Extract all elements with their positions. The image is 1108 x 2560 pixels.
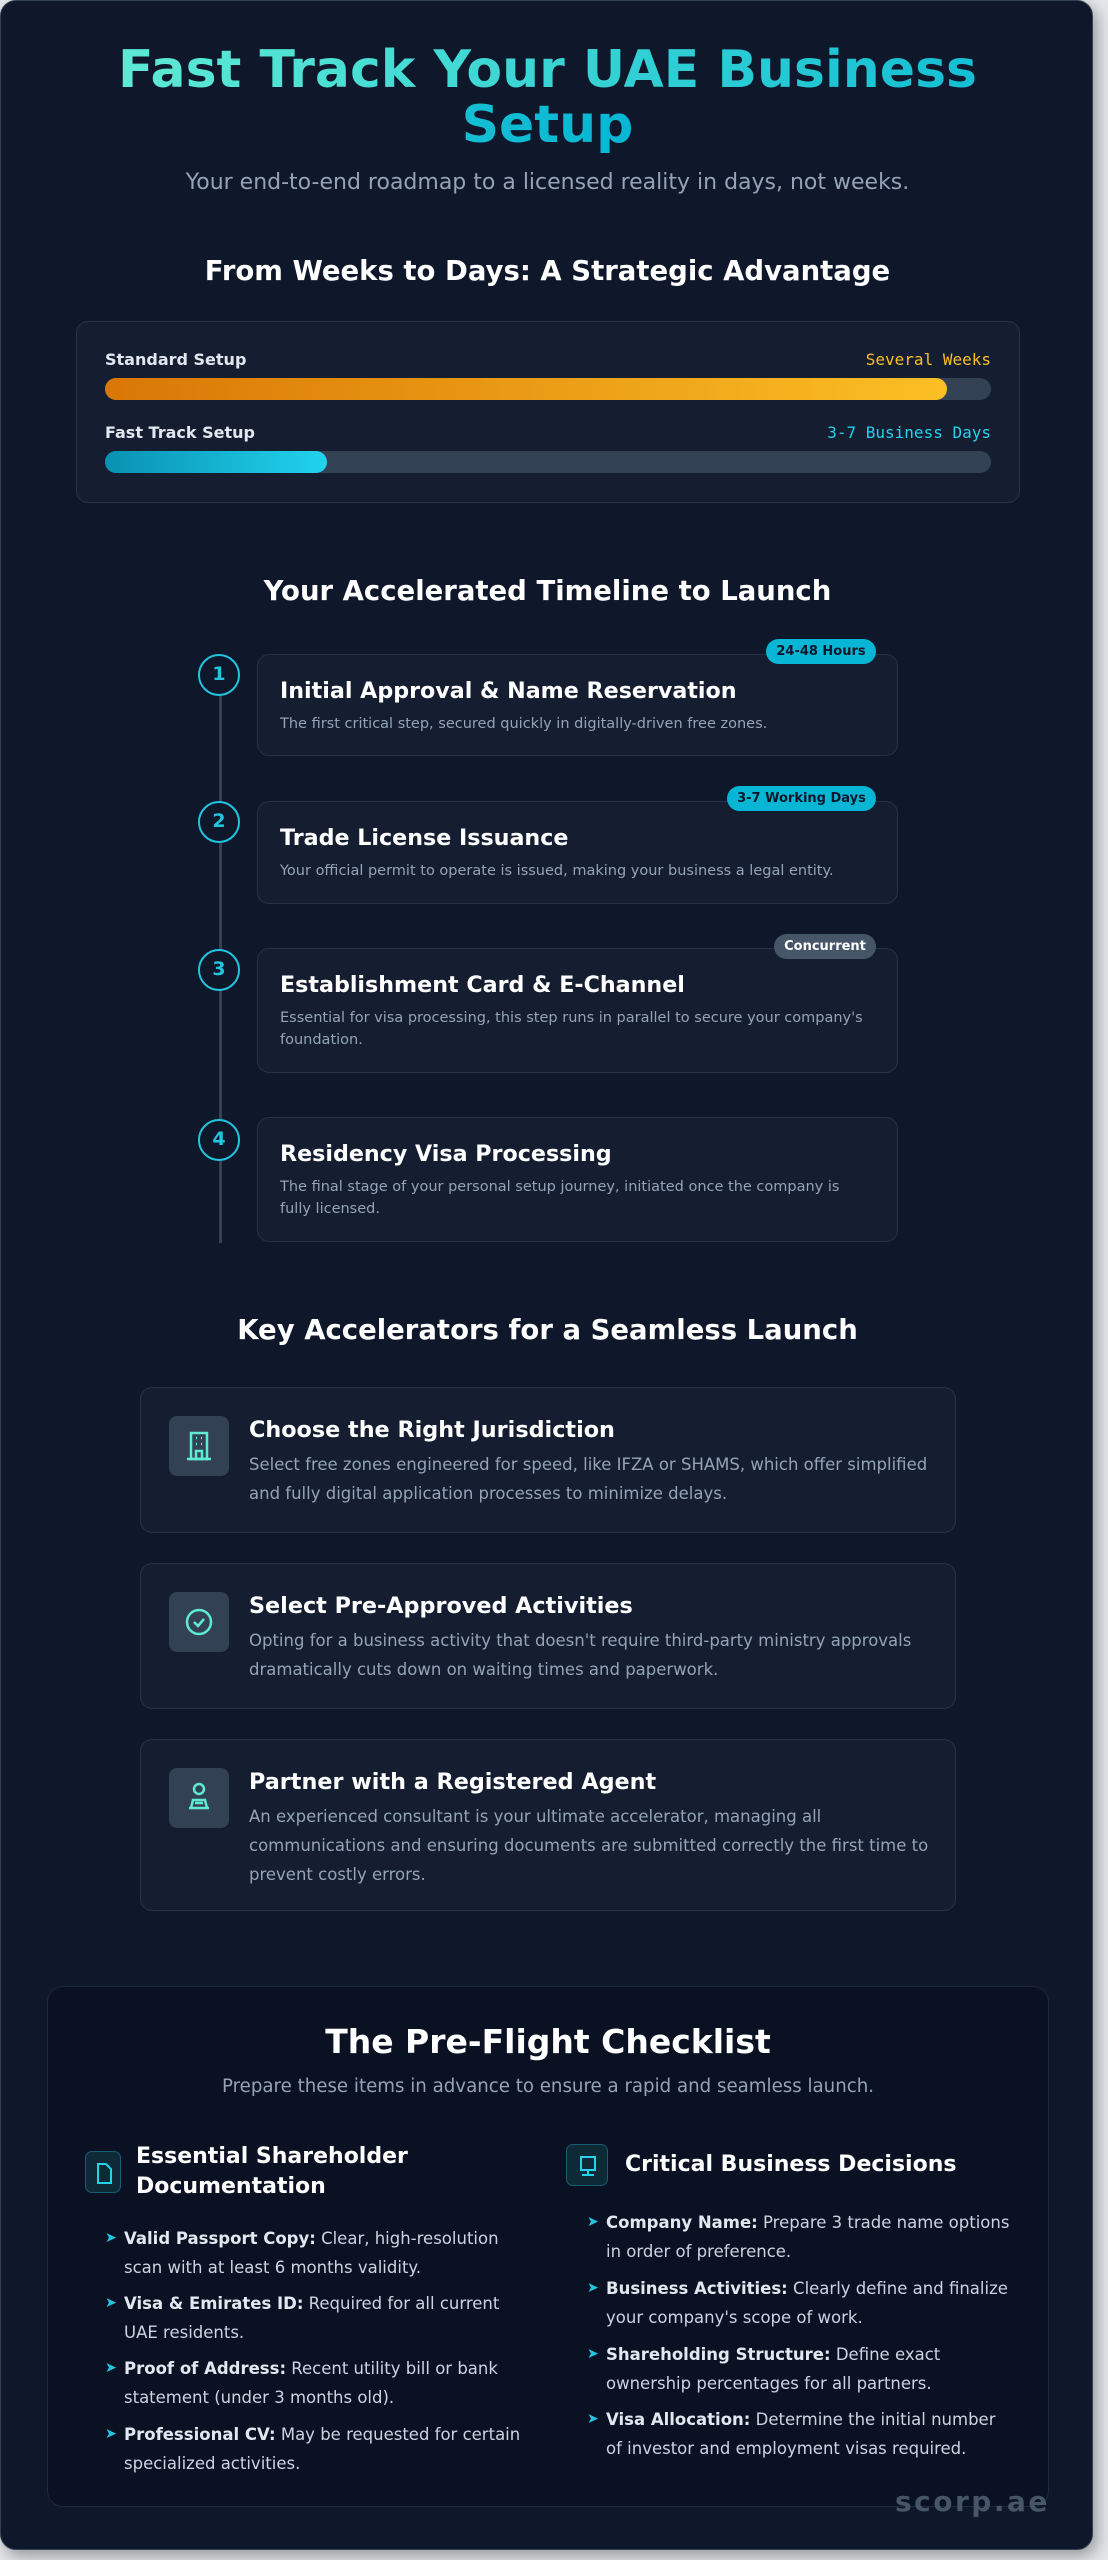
heading: accelerators: Key Accelerators for a Seamless Launch [237, 1314, 858, 1346]
watermark: scorp.ae [895, 2485, 1050, 2518]
column: business decisions: Business Activities: Clearly define and finalize your company's scope of work. [606, 2279, 1008, 2327]
accelerator 2: Select Pre-Approved Activities [249, 1593, 633, 1619]
fast track value: 3-7 Business Days [827, 423, 991, 442]
standard bar [105, 378, 991, 400]
circle 2 [198, 801, 240, 843]
column: business decisions: Visa Allocation: Determine the initial number of investor and employment visas required. [606, 2410, 995, 2458]
card 2 [257, 801, 898, 904]
column: business decisions: ➤ [587, 2411, 599, 2427]
timeline line [219, 691, 222, 1243]
column: shareholder documentation [85, 2144, 520, 2473]
column: shareholder documentation: ➤ [105, 2230, 117, 2246]
accelerator 1: Select free zones engineered for speed, like IFZA or SHAMS, which offer simplified and fully digital application processes to minimize delays. [249, 1455, 927, 1503]
title: Setup [462, 95, 633, 155]
card 1: Initial Approval & Name Reservation [280, 678, 737, 704]
accelerator 2 [140, 1563, 956, 1709]
icon: document [85, 2151, 121, 2193]
circle 4 [198, 1119, 240, 1161]
column: shareholder documentation: Valid Passport Copy: Clear, high-resolution scan with at least 6 months validity. [124, 2229, 499, 2277]
accelerator 1 [140, 1387, 956, 1533]
card 4: Residency Visa Processing [280, 1141, 612, 1167]
card 2: Trade License Issuance [280, 825, 568, 851]
card 4 [257, 1117, 898, 1242]
card 3: Establishment Card & E-Channel [280, 972, 685, 998]
column: shareholder documentation: Essential Shareholder [136, 2144, 408, 2169]
badge 3: Concurrent [784, 939, 866, 954]
panel: checklist [47, 1986, 1049, 2507]
icon: agent [169, 1768, 229, 1828]
circle 3 [198, 949, 240, 991]
column: business decisions [566, 2144, 1009, 2458]
title: Fast Track Your UAE Business [118, 40, 977, 100]
column: business decisions: Company Name: Prepare 3 trade name options in order of preference. [606, 2213, 1009, 2261]
accelerator 1: Choose the Right Jurisdiction [249, 1417, 615, 1443]
accelerator 3: Partner with a Registered Agent [249, 1769, 656, 1795]
card 1 [257, 654, 898, 756]
step 1 [198, 639, 898, 756]
accelerator 3: An experienced consultant is your ultimate accelerator, managing all communications and ensuring documents are submitted correctly the first time to prevent costly errors. [249, 1807, 928, 1884]
column: business decisions: Shareholding Structure: Define exact ownership percentages for all partners. [606, 2345, 940, 2393]
column: business decisions: ➤ [587, 2346, 599, 2362]
checklist subtitle: Prepare these items in advance to ensure a rapid and seamless launch. [222, 2076, 874, 2097]
column: shareholder documentation: Documentation [136, 2174, 326, 2199]
circle 4: 4 [212, 1128, 226, 1150]
column: shareholder documentation: Proof of Address: Recent utility bill or bank statement (under 3 months old). [124, 2359, 498, 2407]
fast track bar [105, 451, 991, 473]
title [118, 40, 977, 155]
column: shareholder documentation: Visa & Emirates ID: Required for all current UAE residents. [124, 2294, 499, 2342]
column: shareholder documentation: ➤ [105, 2295, 117, 2311]
badge 2: 3-7 Working Days [737, 791, 866, 806]
icon: check circle [169, 1592, 229, 1652]
circle 1: 1 [212, 663, 226, 685]
column: shareholder documentation: ➤ [105, 2426, 117, 2442]
heading: comparison: From Weeks to Days: A Strategic Advantage [205, 255, 890, 287]
column: shareholder documentation: ➤ [105, 2360, 117, 2376]
standard setup value: Several Weeks [866, 350, 991, 369]
column: shareholder documentation: Professional CV: May be requested for certain specialized activities. [124, 2425, 520, 2473]
circle 3: 3 [212, 958, 226, 980]
column: business decisions: ➤ [587, 2280, 599, 2296]
circle 2: 2 [212, 810, 226, 832]
card 3: Essential for visa processing, this step runs in parallel to secure your company's foundation. [280, 1010, 863, 1048]
column: business decisions: Critical Business Decisions [625, 2152, 956, 2177]
column: business decisions: ➤ [587, 2214, 599, 2230]
badge 1 [766, 639, 876, 664]
fast track label: Fast Track Setup [105, 423, 255, 442]
step 3 [198, 934, 898, 1073]
step 4 [198, 1117, 898, 1242]
icon: building [169, 1416, 229, 1476]
heading: timeline: Your Accelerated Timeline to Launch [264, 575, 831, 607]
badge 3 [774, 934, 876, 959]
icon: monitor [566, 2144, 608, 2186]
subtitle: Your end-to-end roadmap to a licensed reality in days, not weeks. [186, 170, 909, 195]
step 2 [198, 786, 898, 904]
checklist heading: The Pre-Flight Checklist [325, 2022, 771, 2061]
standard setup label: Standard Setup [105, 350, 246, 369]
card 4: The final stage of your personal setup journey, initiated once the company is fully licensed. [280, 1179, 839, 1217]
card 1: The first critical step, secured quickly in digitally-driven free zones. [280, 716, 767, 732]
badge 1: 24-48 Hours [776, 644, 866, 659]
circle 1 [198, 654, 240, 696]
accelerator 2: Opting for a business activity that doesn't require third-party ministry approvals dramatically cuts down on waiting times and paperwork. [249, 1631, 911, 1679]
badge 2 [727, 786, 876, 811]
panel: comparison bars [76, 321, 1020, 503]
card 3 [257, 948, 898, 1073]
card 2: Your official permit to operate is issued, making your business a legal entity. [280, 863, 834, 879]
accelerator 3 [140, 1739, 956, 1911]
